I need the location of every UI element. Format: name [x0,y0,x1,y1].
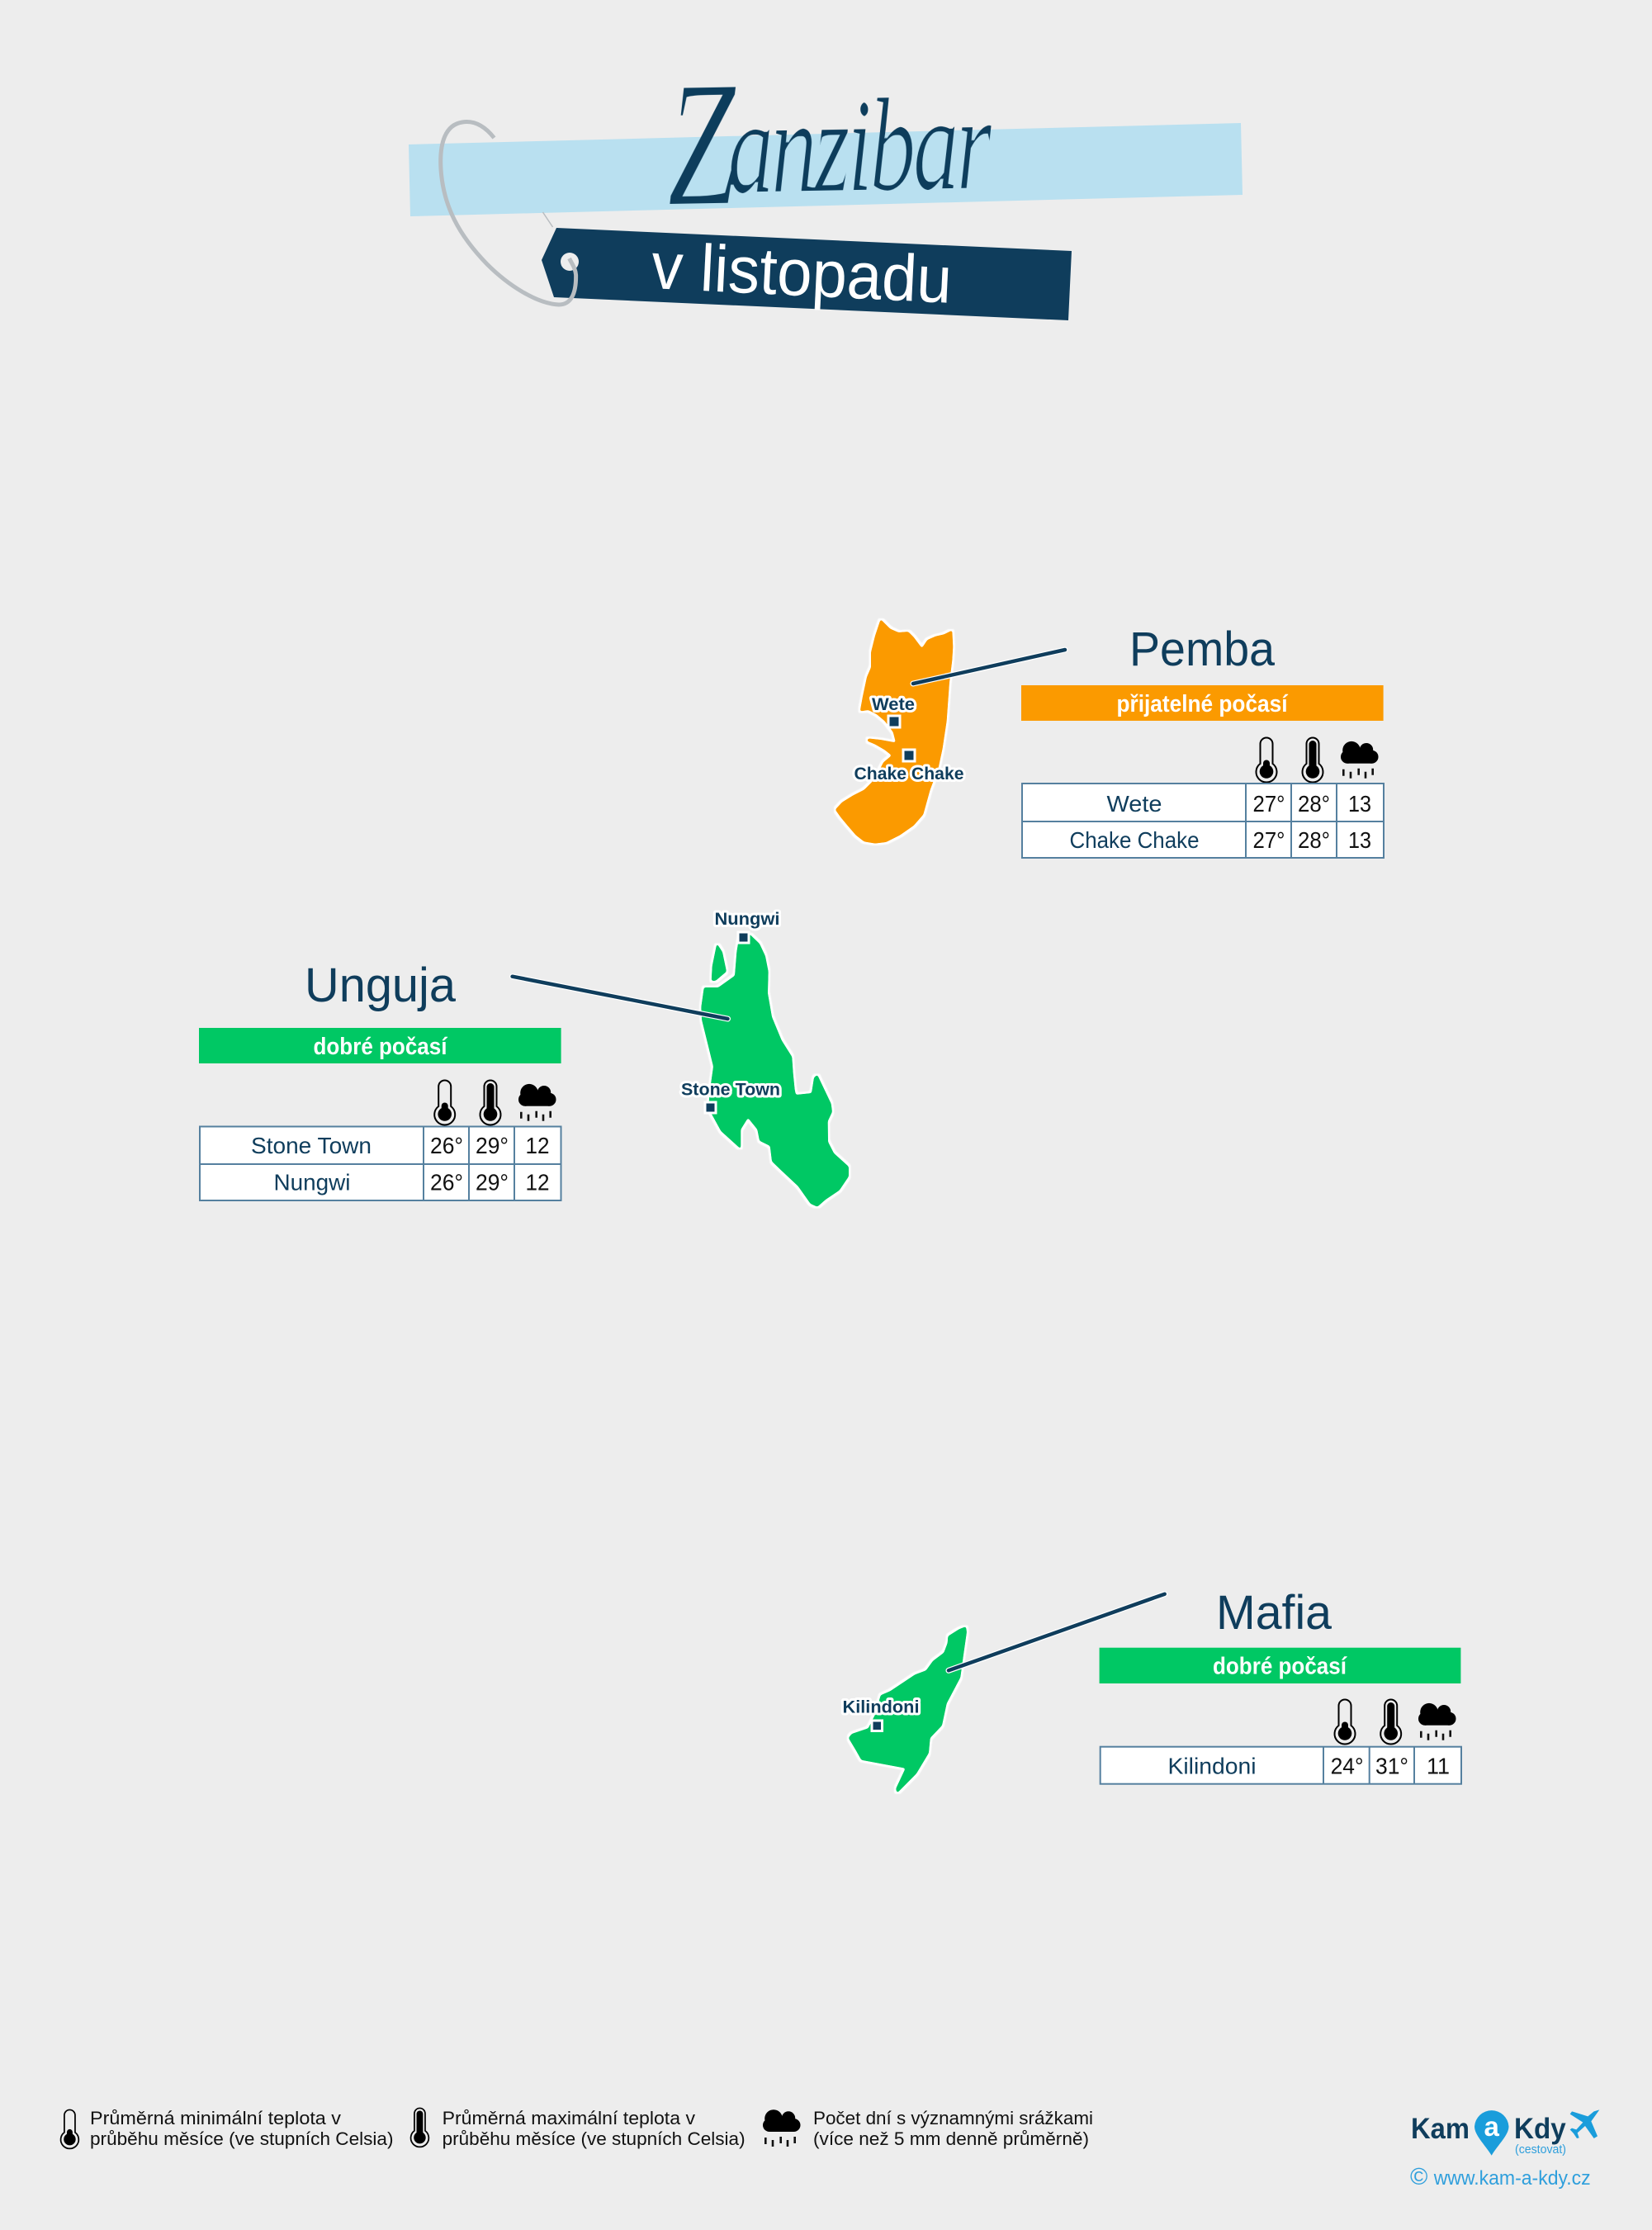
luggage tag [542,228,1072,320]
heading: Unguja: Unguja [305,959,457,1012]
title text: anzibar [726,71,994,221]
copyright and url: © [1410,2164,1427,2190]
table: Pemba: 28° [1298,827,1330,853]
legend item: maximum temperature: průběhu měsíce (ve stupních Celsia) [443,2128,746,2149]
title text: Z [665,46,740,243]
city label: Wete: Wete [872,695,915,714]
table: Pemba: Wete [1106,791,1162,817]
title band [409,123,1243,216]
icons: table header [1334,1699,1456,1744]
legend item: minimum temperature: průběhu měsíce (ve stupních Celsia) [90,2128,393,2149]
table: Unguja: 26° [430,1133,463,1158]
city label: Kilindoni: Kilindoni [842,1697,920,1716]
table: Mafia: 24° [1331,1753,1364,1778]
legend item: rainy days [763,2108,1093,2149]
legend item: minimum temperature: Průměrná minimální teplota v [90,2108,341,2128]
marker: Nungwi [738,932,749,943]
table: Pemba: Chake Chake [1070,827,1199,853]
table: Pemba: 13 [1348,827,1371,853]
table: Unguja: 29° [476,1170,509,1195]
logo word: Kam: Kam [1411,2113,1470,2145]
weather bar: acceptable: přijatelné počasí [1116,691,1288,717]
table: Pemba [1022,784,1384,858]
copyright and url: www.kam-a-kdy.cz [1433,2167,1591,2190]
marker: Wete [888,716,900,727]
table: Unguja: 29° [476,1133,509,1158]
legend item: rainy days: (více než 5 mm denně průměrně) [813,2128,1089,2149]
legend item: maximum temperature: Průměrná maximální teplota v [443,2108,695,2128]
heading: Mafia: Mafia [1216,1586,1332,1640]
title block [409,42,1243,320]
legend item: maximum temperature [411,2108,746,2149]
table: Mafia: Kilindoni [1167,1753,1257,1778]
logo: Kam a Kdy [1410,2109,1599,2190]
tag string [441,122,576,305]
subtitle text: v listopadu [650,229,954,317]
table: Pemba: 27° [1253,827,1285,853]
table: Pemba: 28° [1298,791,1330,817]
icons: table header [434,1080,556,1124]
panel: Mafia [842,1586,1461,1793]
callout line: Pemba [913,650,1065,684]
weather bar: good: dobré počasí [314,1034,447,1060]
table: Pemba: 13 [1348,791,1371,817]
logo word: Kdy: Kdy [1514,2113,1566,2145]
map: Unguja island [701,935,849,1207]
city label: Nungwi: Nungwi [715,910,779,929]
map: Pemba island [835,619,953,844]
table: Unguja: Stone Town [251,1133,372,1158]
table: Pemba: 27° [1253,791,1285,817]
weather bar: good [1100,1648,1460,1683]
table: Unguja: Nungwi [274,1170,350,1195]
table: Unguja [200,1126,561,1200]
table: Unguja: 26° [430,1170,463,1195]
table: Mafia [1101,1747,1461,1784]
icon: plane [1570,2109,1599,2138]
tag hole [561,253,579,271]
weather bar: acceptable [1021,685,1384,721]
marker: Chake Chake [903,750,915,761]
icons: table header [1257,738,1379,783]
heading: Pemba: Pemba [1129,623,1276,676]
table: Unguja: 12 [525,1170,550,1195]
icon: location pin [1474,2110,1509,2156]
logo subtitle: (cestovat) [1515,2142,1566,2157]
marker: Stone Town [705,1102,716,1113]
legend item: rainy days: Počet dní s významnými srážkami [813,2108,1093,2128]
panel: Pemba [835,619,1384,858]
table: Mafia: 11 [1427,1753,1450,1778]
table: Unguja: 12 [525,1133,550,1158]
callout line: Unguja [513,977,728,1019]
city label: Chake Chake: Chake Chake [854,765,964,784]
weather bar: good [199,1028,561,1063]
weather bar: good: dobré počasí [1213,1654,1347,1680]
marker: Kilindoni [872,1721,882,1730]
callout line: Mafia [949,1594,1165,1670]
panel: Unguja [199,910,849,1207]
city label: Stone Town: Stone Town [681,1081,780,1100]
logo letter: a: a [1484,2111,1500,2142]
legend [61,2108,1093,2149]
map: Mafia island [849,1626,967,1793]
legend item: minimum temperature [61,2108,393,2149]
table: Mafia: 31° [1375,1753,1408,1778]
